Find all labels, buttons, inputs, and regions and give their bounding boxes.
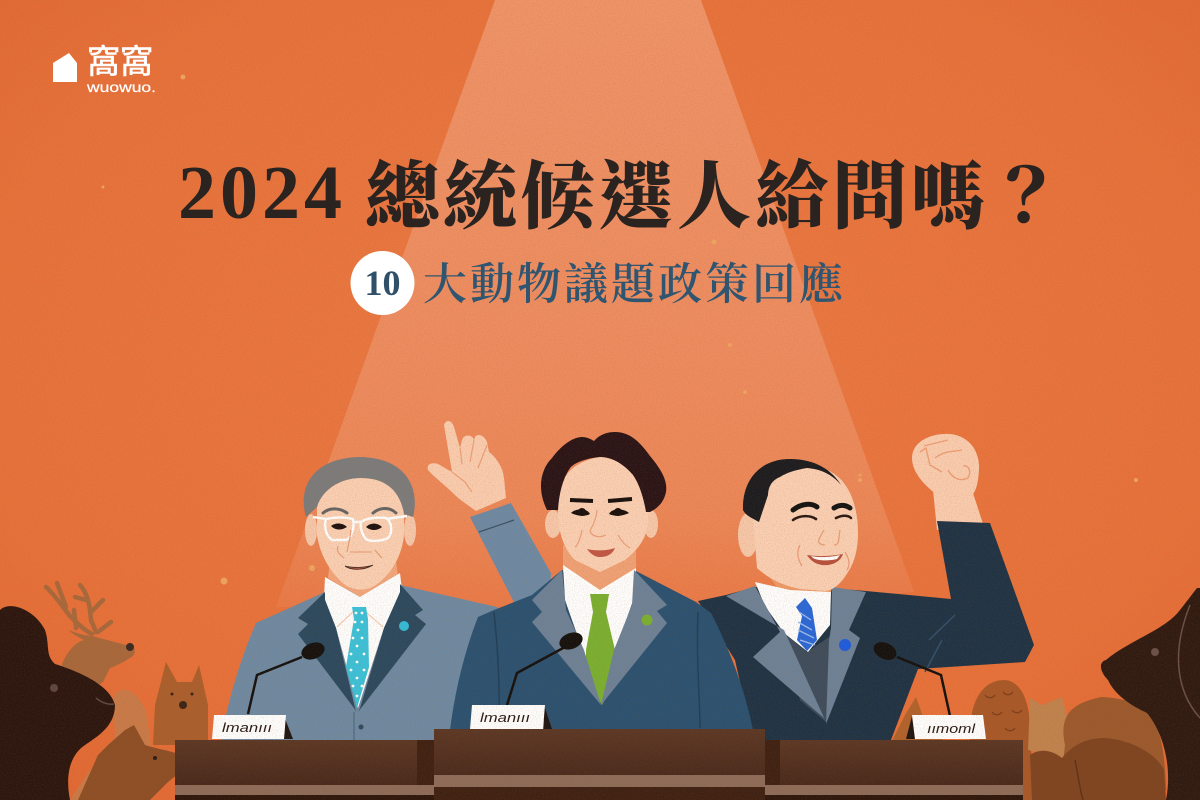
logo wordmark chinese: 窩窩 [87,35,153,83]
lapels [726,586,826,722]
face [558,457,648,572]
ear right [644,510,658,538]
animals left [0,583,208,800]
animal: deer ears [890,697,945,745]
animal: squirrel [70,690,151,800]
nose and wrinkles [337,530,382,558]
neck [563,545,636,596]
hair [304,457,415,517]
title: 總統候選人給問嗎？ [365,138,1067,244]
elbow crease [925,615,955,672]
sleeve [470,503,551,610]
name card: left: lmanııı [222,720,272,735]
glasses [313,516,407,541]
microphone: right [871,639,950,716]
microphone: centre [507,629,585,705]
animal: cat [1028,697,1075,760]
microphone: left [248,639,327,714]
shirt and collar [563,565,636,660]
candidate: right, navy suit, raised fist [698,434,1034,740]
cuff line [479,520,514,532]
candidate: centre, blue suit, raised hand [428,421,753,730]
dust specks [102,74,1138,584]
podium centre [434,729,765,800]
icon: house [53,53,77,82]
name card: centre: lmanııı [480,710,530,725]
face [752,467,858,591]
candidate: left, grey suit [221,457,520,740]
name card: right: ıımoml [927,721,976,736]
ears [545,510,561,538]
pin [642,614,652,626]
logo wordmark latin: wuowuo. [86,79,156,95]
brows [570,499,632,501]
animal: bear [1101,588,1200,800]
tie [586,594,616,705]
hair [743,459,841,522]
hand [428,421,506,511]
suit [221,585,520,740]
number badge [350,251,414,315]
animal: beaver [1060,697,1166,790]
face [317,478,404,590]
fist [912,434,979,498]
animal: small dog [78,725,190,800]
mouth [587,548,615,557]
subtitle [350,248,846,315]
teeth [811,555,840,560]
suit [450,570,753,730]
podium [175,729,1023,800]
podium right [762,740,1023,800]
neck [328,560,398,597]
forearm [933,490,985,530]
vest [784,633,830,722]
ear right [404,514,416,546]
eyes [571,508,629,516]
name card: left [212,715,293,739]
brows [793,504,850,510]
pin [839,639,851,651]
lapels [532,570,601,705]
number badge: 10 [364,263,400,303]
animal: dog [153,662,208,745]
lapels [298,592,356,712]
eyes [793,516,851,520]
suit [698,521,1034,740]
nose and wrinkles [798,530,849,570]
name card: right [906,715,986,739]
pin [399,621,409,631]
button and seam [353,712,355,740]
podium left [175,740,437,800]
name card: centre [470,705,552,729]
ears [305,514,317,546]
brows [323,508,396,513]
nose and wrinkles [575,510,630,548]
animal: deer [46,583,135,690]
animal: bear back [1030,738,1166,800]
eyes [331,523,382,530]
neck [765,570,835,592]
title: 2024 [178,151,346,235]
animal: bear [0,606,115,800]
spotlight beam [276,0,914,610]
subtitle text: 大動物議題政策回應 [423,248,846,312]
animal: pangolin [970,680,1040,800]
suit seam [494,612,700,728]
tie [346,607,369,708]
shirt and collar [324,573,402,708]
hair [541,432,666,512]
ear [738,513,758,557]
logo [53,35,156,95]
mouth [345,565,373,569]
animals right [890,588,1200,800]
shirt and collar [755,582,831,652]
tie [796,598,817,651]
mouth [807,554,843,565]
